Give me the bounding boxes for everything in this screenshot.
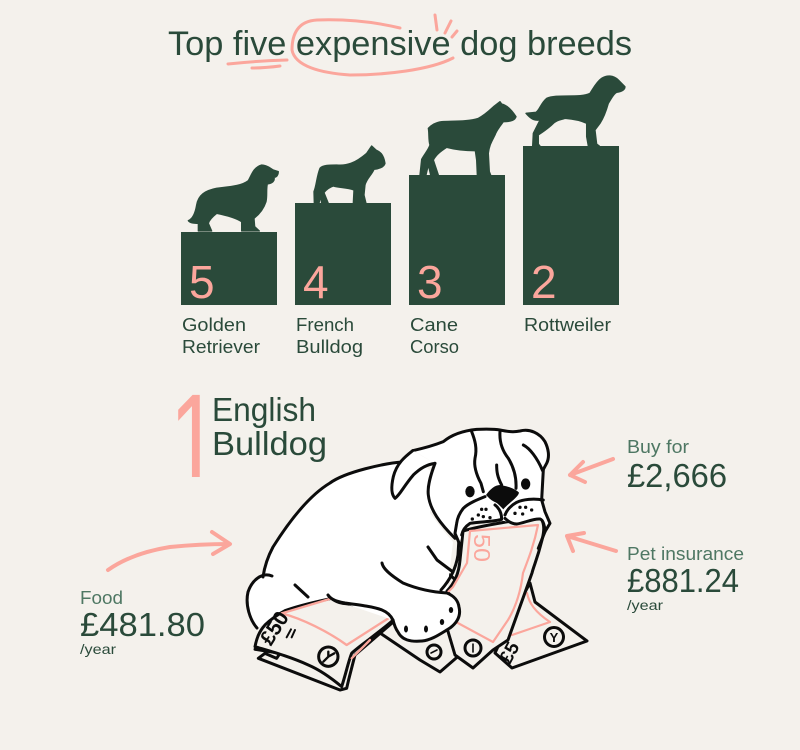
breed 5: Golden Retriever — [181, 165, 278, 357]
value: £2,666 — [627, 457, 727, 494]
title: Top five expensive dog breeds — [168, 25, 632, 63]
arrow — [567, 533, 616, 551]
label: Golden Retriever: Golden — [182, 315, 246, 335]
banknote: centre, in mouth: 50 — [469, 534, 495, 562]
value: £881.24 — [627, 562, 739, 599]
banknote: right: Y — [550, 630, 559, 645]
banknote: right — [495, 583, 587, 668]
silhouette: cane corso — [420, 102, 516, 175]
label: Rottweiler: Rottweiler — [524, 315, 611, 335]
banknote: right: £5 — [496, 638, 525, 667]
whisker dots — [471, 506, 533, 521]
dog body — [247, 455, 460, 632]
rank number 3: 3 — [417, 256, 443, 308]
podium 4 — [295, 203, 391, 305]
callout: pet insurance — [567, 533, 744, 613]
arrow — [108, 532, 230, 570]
nose — [486, 485, 519, 509]
banknote: left: £50 — [256, 607, 294, 649]
arrow — [570, 459, 613, 482]
callout: buy price — [570, 437, 727, 494]
label: Cane Corso: Cane — [410, 315, 458, 335]
rank number 1: 1 — [170, 367, 219, 517]
value: £481.80 — [80, 606, 205, 643]
silhouette: rottweiler — [526, 76, 625, 146]
head — [392, 429, 550, 548]
front paw — [328, 563, 460, 641]
eyes — [465, 486, 475, 497]
label: Golden Retriever: Retriever — [182, 337, 260, 357]
per year: /year — [627, 597, 663, 613]
breed 2: Rottweiler — [523, 76, 625, 335]
label: French Bulldog: French — [296, 315, 354, 335]
silhouette: golden retriever — [188, 165, 278, 231]
breed 3: Cane Corso — [409, 102, 516, 357]
rank number 4: 4 — [303, 256, 329, 308]
label: Pet insurance — [627, 544, 744, 564]
heading: English Bulldog: English — [212, 391, 316, 428]
banknote: centre, in mouth — [441, 518, 544, 668]
label: French Bulldog: Bulldog — [296, 337, 363, 357]
podium 3 — [409, 175, 505, 305]
heading: English Bulldog: Bulldog — [212, 425, 327, 462]
illustration: bulldog on banknotes — [247, 429, 587, 690]
title scribbles — [228, 15, 457, 75]
podium 2 — [523, 146, 619, 305]
callout: food — [80, 532, 230, 657]
banknote: back, under paw — [380, 568, 500, 672]
muzzle — [455, 497, 485, 545]
rank number 5: 5 — [189, 256, 215, 308]
rank number 2: 2 — [531, 256, 557, 308]
per year: /year — [80, 641, 116, 657]
label: Buy for — [627, 437, 689, 457]
breed 4: French Bulldog — [295, 146, 391, 357]
label: Cane Corso: Corso — [410, 337, 459, 357]
banknote: left — [255, 598, 393, 690]
label: Food — [80, 588, 123, 608]
podium 5 — [181, 232, 277, 305]
silhouette: french bulldog — [314, 146, 385, 203]
